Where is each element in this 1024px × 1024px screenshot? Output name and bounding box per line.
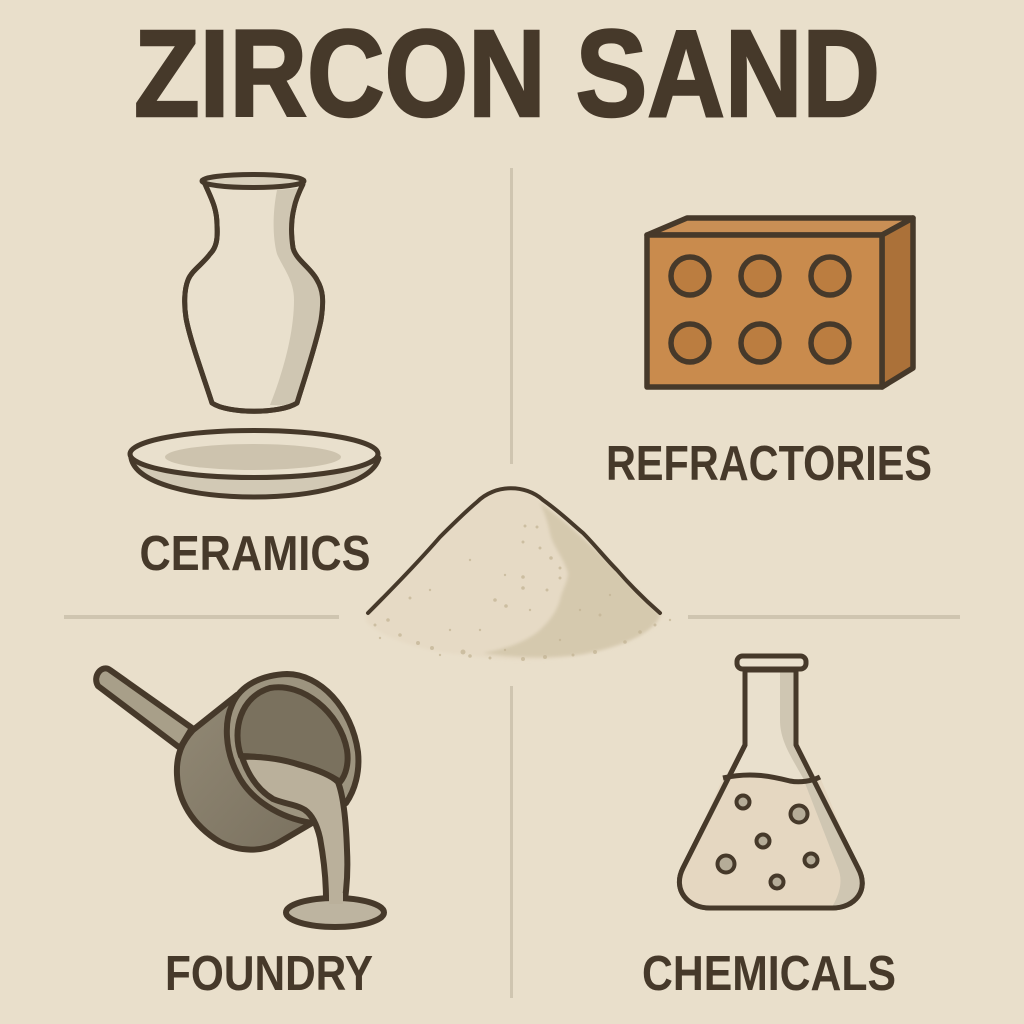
plate underside — [131, 458, 379, 497]
ladle body — [177, 695, 312, 850]
bubbles — [718, 796, 818, 888]
label: ceramics: CERAMICS — [140, 527, 370, 581]
molten puddle — [286, 898, 384, 927]
icon: foundry ladle pouring — [96, 668, 384, 927]
plate well — [165, 444, 341, 470]
liquid surface — [723, 775, 820, 782]
label: chemicals: CHEMICALS — [642, 947, 896, 1001]
title: ZIRCON SAND — [134, 6, 880, 143]
sand speckles — [374, 524, 671, 661]
ladle interior — [238, 687, 348, 782]
pile shaded side — [483, 503, 660, 657]
vase rim — [202, 174, 304, 188]
label: foundry: FOUNDRY — [165, 947, 373, 1001]
pile light side — [366, 488, 662, 660]
flask lip — [737, 656, 806, 669]
flask shading — [780, 670, 861, 907]
molten stream — [242, 757, 347, 899]
ladle rim — [227, 674, 358, 823]
label: refractories: REFRACTORIES — [606, 437, 932, 491]
icon: sand pile — [366, 488, 671, 661]
icon: chemical flask — [679, 656, 862, 908]
vase body — [185, 184, 323, 411]
liquid — [679, 775, 862, 908]
stream junction — [329, 893, 343, 904]
ladle handle — [96, 668, 192, 748]
plate top — [130, 430, 378, 478]
icon: ceramic vase and plate — [130, 174, 379, 497]
vase shading — [270, 188, 322, 405]
flask glass — [679, 670, 862, 908]
icon: refractory brick — [647, 218, 913, 387]
flask outline — [679, 670, 862, 908]
pile outline — [368, 488, 660, 613]
